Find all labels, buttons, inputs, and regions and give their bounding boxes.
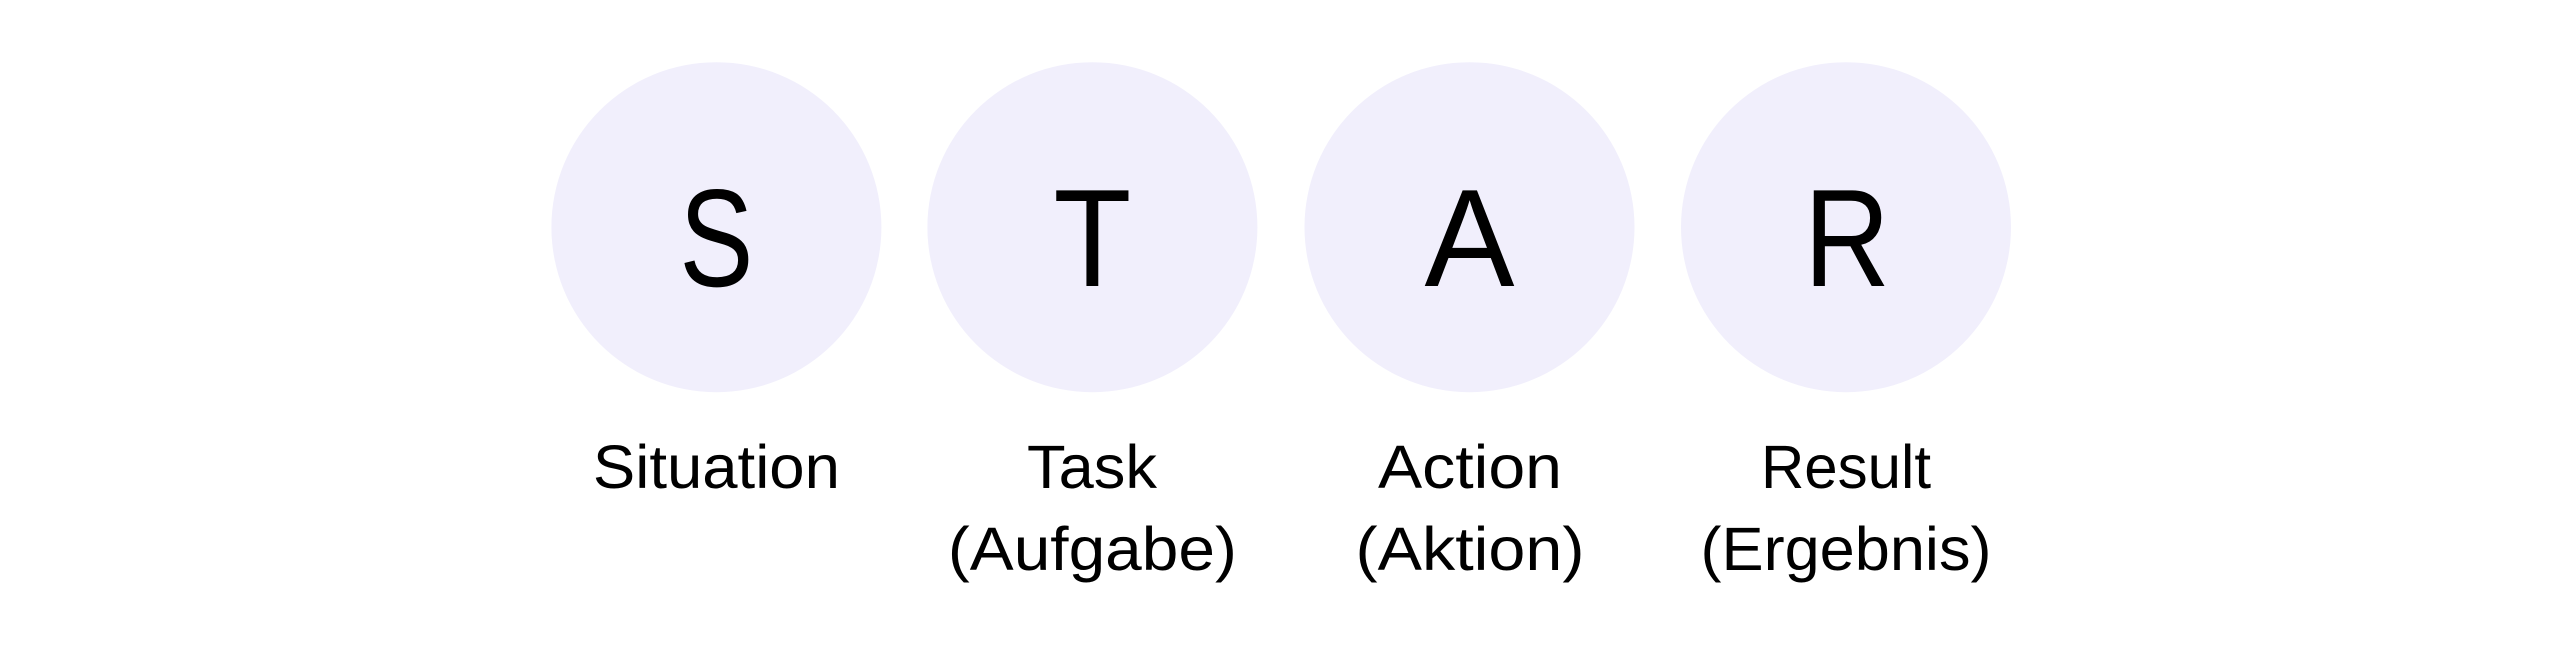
letter: R: R (1804, 161, 1890, 316)
letter: A: A (1424, 161, 1515, 316)
label: Task (Aufgabe): (Aufgabe) (948, 515, 1237, 583)
letter: T: T (1053, 161, 1131, 316)
panel: Action (1304, 62, 1634, 583)
label: Situation: Situation (593, 433, 840, 501)
circle: R (1681, 62, 2011, 392)
panel: Situation (551, 62, 881, 501)
label: Result (Ergebnis): Result (1761, 433, 1931, 501)
label: Action (Aktion): (Aktion) (1356, 515, 1584, 583)
label: Result (Ergebnis) (1700, 433, 1992, 583)
label: Result (Ergebnis): (Ergebnis) (1700, 515, 1992, 583)
label: Task (Aufgabe) (948, 433, 1237, 583)
label: Action (Aktion): Action (1378, 433, 1562, 501)
circle: A (1304, 62, 1634, 392)
label: Task (Aufgabe): Task (1027, 433, 1158, 501)
label: Action (Aktion) (1356, 433, 1584, 583)
circle: S (551, 62, 881, 392)
panel: Task (927, 62, 1257, 583)
letter: S: S (679, 161, 753, 316)
panel: Result (1681, 62, 2011, 583)
circle: T (927, 62, 1257, 392)
